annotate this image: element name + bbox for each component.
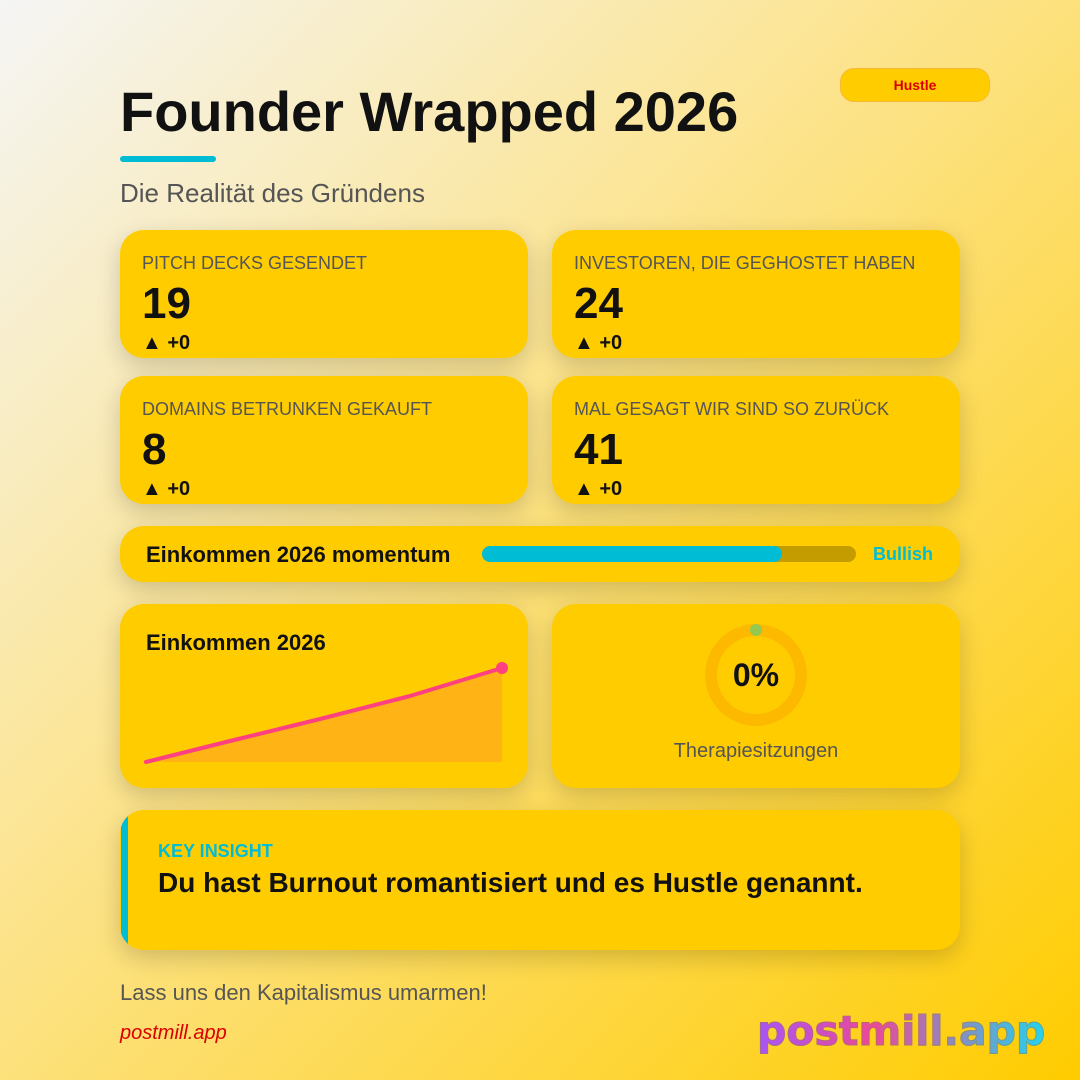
- stat card: investors: ▲ +0: [574, 332, 622, 354]
- stat card: investors: [552, 230, 960, 358]
- insight text: Du hast Burnout romantisiert und es Hustle genannt.: [158, 867, 863, 898]
- stat card: domains: 8: [142, 425, 166, 474]
- momentum label: Einkommen 2026 momentum: [146, 542, 450, 567]
- stat card: investors: 24: [574, 279, 623, 328]
- stat card: domains: [120, 376, 528, 504]
- panel: momentum bar: [120, 526, 960, 582]
- chart title: Einkommen 2026: [146, 630, 326, 655]
- area chart: [144, 662, 508, 764]
- stat card: pitch decks: [120, 230, 528, 358]
- stat card: domains: DOMAINS BETRUNKEN GEKAUFT: [142, 399, 432, 419]
- panel: therapy donut: [552, 604, 960, 788]
- footer link: postmill.app: [120, 1022, 227, 1044]
- stat card: investors: INVESTOREN, DIE GEGHOSTET HABEN: [574, 253, 915, 273]
- stat card: so zurück: 41: [574, 425, 623, 474]
- stat card: so zurück: [552, 376, 960, 504]
- panel: key insight: [120, 810, 960, 950]
- footer text: Lass uns den Kapitalismus umarmen!: [120, 980, 487, 1005]
- subtitle: Die Realität des Gründens: [120, 178, 425, 208]
- accent bar: [121, 810, 128, 950]
- panel: income chart: [120, 604, 528, 788]
- stat card: domains: ▲ +0: [142, 478, 190, 500]
- stat card: pitch decks: PITCH DECKS GESENDET: [142, 253, 367, 273]
- stat card: pitch decks: 19: [142, 279, 191, 328]
- insight label: KEY INSIGHT: [158, 841, 273, 861]
- donut chart: [705, 624, 807, 726]
- title: Founder Wrapped 2026: [120, 80, 738, 143]
- donut value: 0%: [733, 657, 779, 693]
- title underline: [120, 156, 216, 162]
- momentum status: Bullish: [873, 544, 933, 564]
- badge: Hustle: [840, 68, 990, 102]
- stat card: so zurück: ▲ +0: [574, 478, 622, 500]
- progress bar: [482, 546, 856, 562]
- donut label: Therapiesitzungen: [674, 740, 838, 762]
- stat card: so zurück: MAL GESAGT WIR SIND SO ZURÜCK: [574, 399, 889, 419]
- stat card: pitch decks: ▲ +0: [142, 332, 190, 354]
- badge: Hustle: Hustle: [894, 77, 936, 93]
- watermark: postmill.app: postmill.app: [757, 1007, 1045, 1055]
